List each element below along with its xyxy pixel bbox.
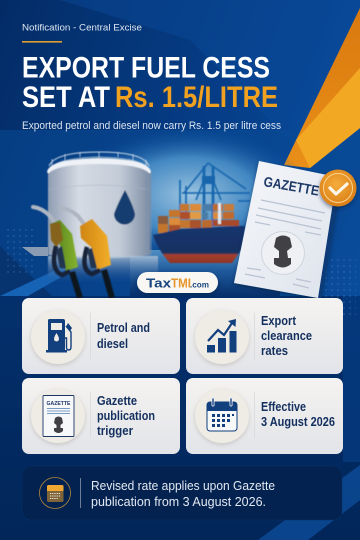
container ship and crane	[153, 163, 250, 263]
icon: gazette page: GAZETTE	[46, 401, 71, 407]
platform	[22, 247, 48, 256]
gazette document: GAZETTE	[262, 173, 320, 199]
callout banner	[22, 466, 342, 520]
card: effective date	[186, 378, 343, 454]
text: petrol and diesel: Petrol and	[97, 320, 150, 335]
title: SET AT	[22, 81, 110, 114]
water	[130, 250, 280, 296]
yellow nozzle	[61, 208, 112, 298]
text: petrol and diesel: diesel	[97, 336, 128, 351]
emblem seal	[262, 232, 304, 274]
callout text: publication from 3 August 2026.	[91, 495, 266, 509]
subtitle: Exported petrol and diesel now carry Rs. 1.5 per litre cess	[22, 120, 281, 132]
tank reflection	[48, 256, 158, 284]
text: export clearance rates: Export	[261, 313, 297, 328]
icon: oil drop	[114, 190, 135, 224]
text: export clearance rates: rates	[261, 343, 288, 358]
TaxTMI logo pill	[137, 272, 218, 293]
accent rule	[22, 41, 62, 43]
gazette document	[234, 161, 342, 300]
title	[22, 52, 278, 114]
text: gazette publication trigger: Gazette	[97, 393, 137, 408]
icon: gazette page	[43, 396, 74, 436]
title: EXPORT FUEL CESS	[22, 52, 270, 84]
TaxTMI logo pill: Tax	[146, 276, 172, 290]
green nozzle	[33, 207, 80, 298]
card: export clearance rates	[186, 298, 343, 374]
TaxTMI logo pill: .com	[190, 280, 209, 290]
title: Rs. 1.5/LITRE	[115, 81, 278, 114]
card: petrol and diesel	[22, 298, 180, 374]
orange diagonal stripe	[284, 8, 360, 168]
text: effective date: Effective	[261, 399, 306, 414]
card: gazette publication trigger	[22, 378, 180, 454]
icon: rising bar chart	[207, 319, 236, 352]
sky glow	[70, 127, 310, 263]
text: gazette publication trigger: trigger	[97, 423, 133, 438]
callout text: Revised rate applies upon Gazette	[91, 479, 275, 493]
fuel nozzles	[33, 207, 112, 298]
storage tank	[47, 152, 158, 284]
icon: calendar	[207, 399, 237, 431]
text: gazette publication trigger: publication	[97, 408, 155, 423]
check badge	[320, 170, 356, 206]
TaxTMI logo pill: TMI	[171, 276, 191, 290]
icon: fuel pump	[46, 319, 72, 352]
icon: orange calendar	[40, 478, 70, 508]
hero scene	[22, 127, 356, 300]
header label: Notification - Central Excise	[22, 22, 142, 34]
text: effective date: 3 August 2026	[261, 414, 335, 429]
text: export clearance rates: clearance	[261, 328, 312, 343]
